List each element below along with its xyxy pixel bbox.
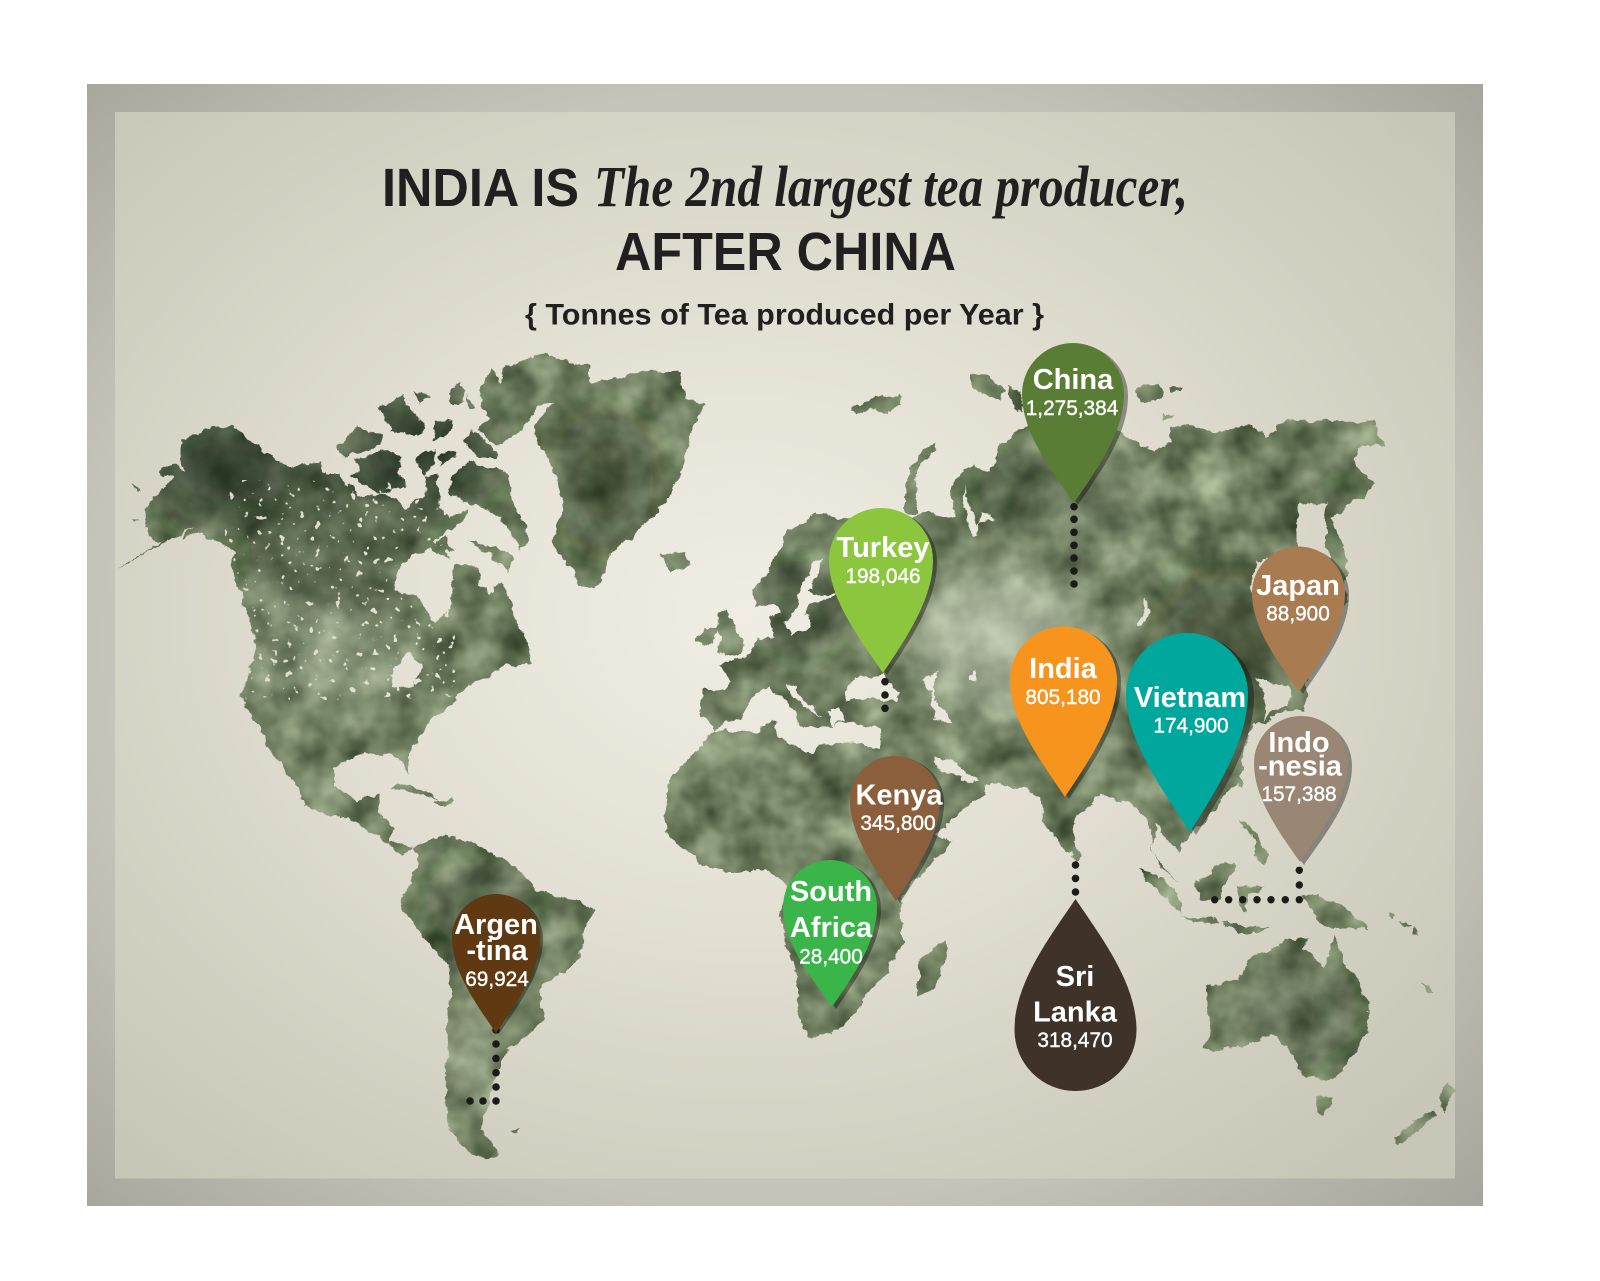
pin: China	[1022, 343, 1128, 505]
dots: Sri Lanka	[1072, 861, 1079, 896]
dots: China	[1070, 503, 1078, 588]
pin: Argentina: Argen	[454, 909, 538, 941]
pin: Sri Lanka: Sri	[1056, 961, 1094, 993]
inner panel	[115, 112, 1455, 1178]
pin: South Africa: Africa	[790, 912, 873, 944]
world map	[118, 352, 1456, 1160]
pin: Indonesia: Indo	[1268, 727, 1330, 759]
pin: Indonesia: 157,388	[1261, 783, 1337, 806]
pin: Vietnam	[1126, 633, 1254, 835]
title line 1 script: The 2nd largest tea producer,	[594, 154, 1188, 219]
pin: Japan	[1252, 546, 1349, 694]
pin: Japan: Japan	[1256, 570, 1340, 602]
title line 2: AFTER CHINA	[615, 222, 956, 282]
pin: Kenya	[850, 756, 944, 903]
pin: Kenya: Kenya	[855, 780, 943, 812]
pin: Indonesia: -nesia	[1258, 750, 1343, 782]
pin: Indonesia	[1254, 716, 1352, 865]
pin: South Africa	[783, 860, 881, 1009]
pin: India: India	[1029, 653, 1098, 685]
infographic canvas	[87, 84, 1483, 1206]
pin: South Africa: 28,400	[799, 946, 863, 969]
pin: Argentina	[452, 894, 543, 1034]
dots: Indonesia	[1211, 867, 1303, 903]
title line 1 bold: INDIA IS	[382, 158, 579, 218]
pin: Turkey: 198,046	[845, 565, 921, 588]
subtitle: { Tonnes of Tea produced per Year }	[525, 298, 1045, 332]
pin: Japan: 88,900	[1266, 603, 1330, 626]
pin: Turkey	[829, 508, 937, 675]
pin: Sri Lanka	[1014, 899, 1136, 1091]
pin: Argentina: -tina	[466, 935, 528, 967]
pin: Vietnam: Vietnam	[1134, 682, 1246, 714]
pin: Argentina: 69,924	[465, 968, 529, 991]
outer frame	[87, 84, 1483, 1206]
pin: Sri Lanka: Lanka	[1033, 997, 1118, 1029]
pin: South Africa: South	[790, 876, 872, 908]
pin: India	[1010, 626, 1121, 799]
title	[382, 154, 1188, 282]
dots: Argentina	[466, 1026, 500, 1105]
pin: Vietnam: 174,900	[1153, 715, 1229, 738]
pin: China: 1,275,384	[1026, 397, 1118, 420]
pin: China: China	[1033, 364, 1114, 396]
dots: Turkey	[881, 678, 889, 712]
dotted connectors	[466, 503, 1303, 1105]
pin: India: 805,180	[1025, 686, 1101, 709]
pin: Sri Lanka: 318,470	[1037, 1029, 1113, 1052]
pin: Kenya: 345,800	[860, 812, 936, 835]
pin: Turkey: Turkey	[837, 532, 929, 564]
